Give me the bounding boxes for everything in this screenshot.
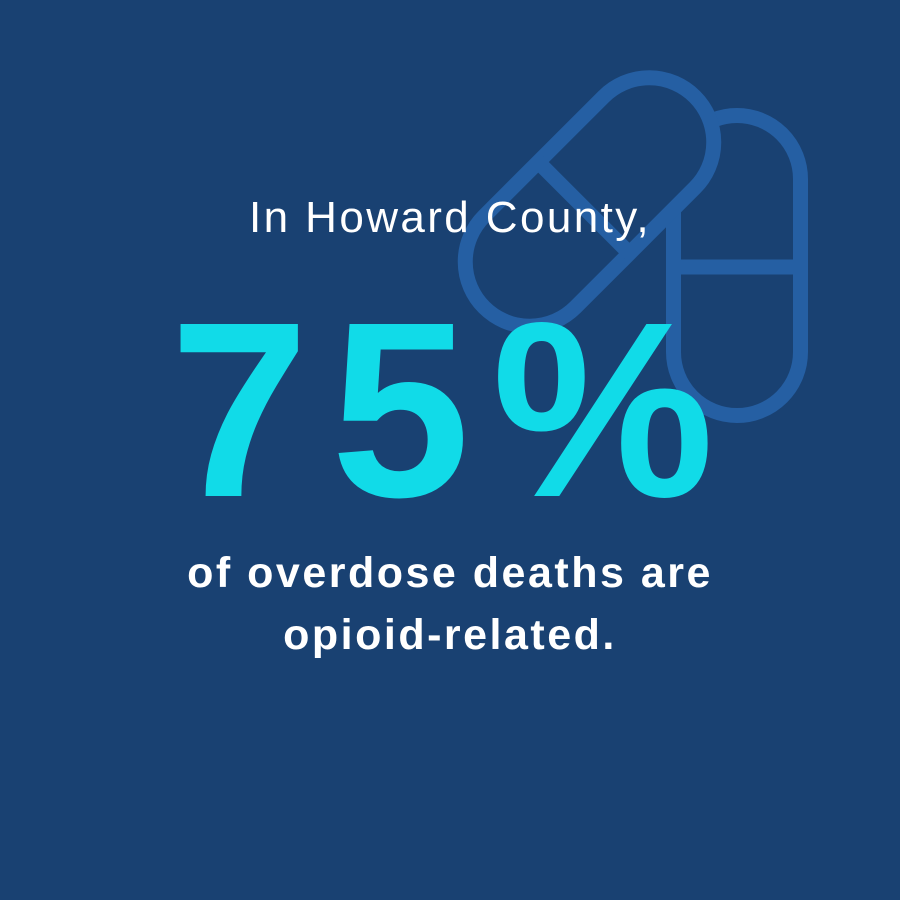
text block: description: opioid-related. (283, 611, 617, 659)
icon: diagonal capsule (438, 51, 741, 353)
text block: description (187, 549, 713, 659)
text block: description: of overdose deaths are (187, 549, 713, 597)
big number: 75% (170, 270, 736, 549)
heading: intro: In Howard County, (249, 193, 651, 242)
icon: vertical capsule (673, 116, 801, 416)
